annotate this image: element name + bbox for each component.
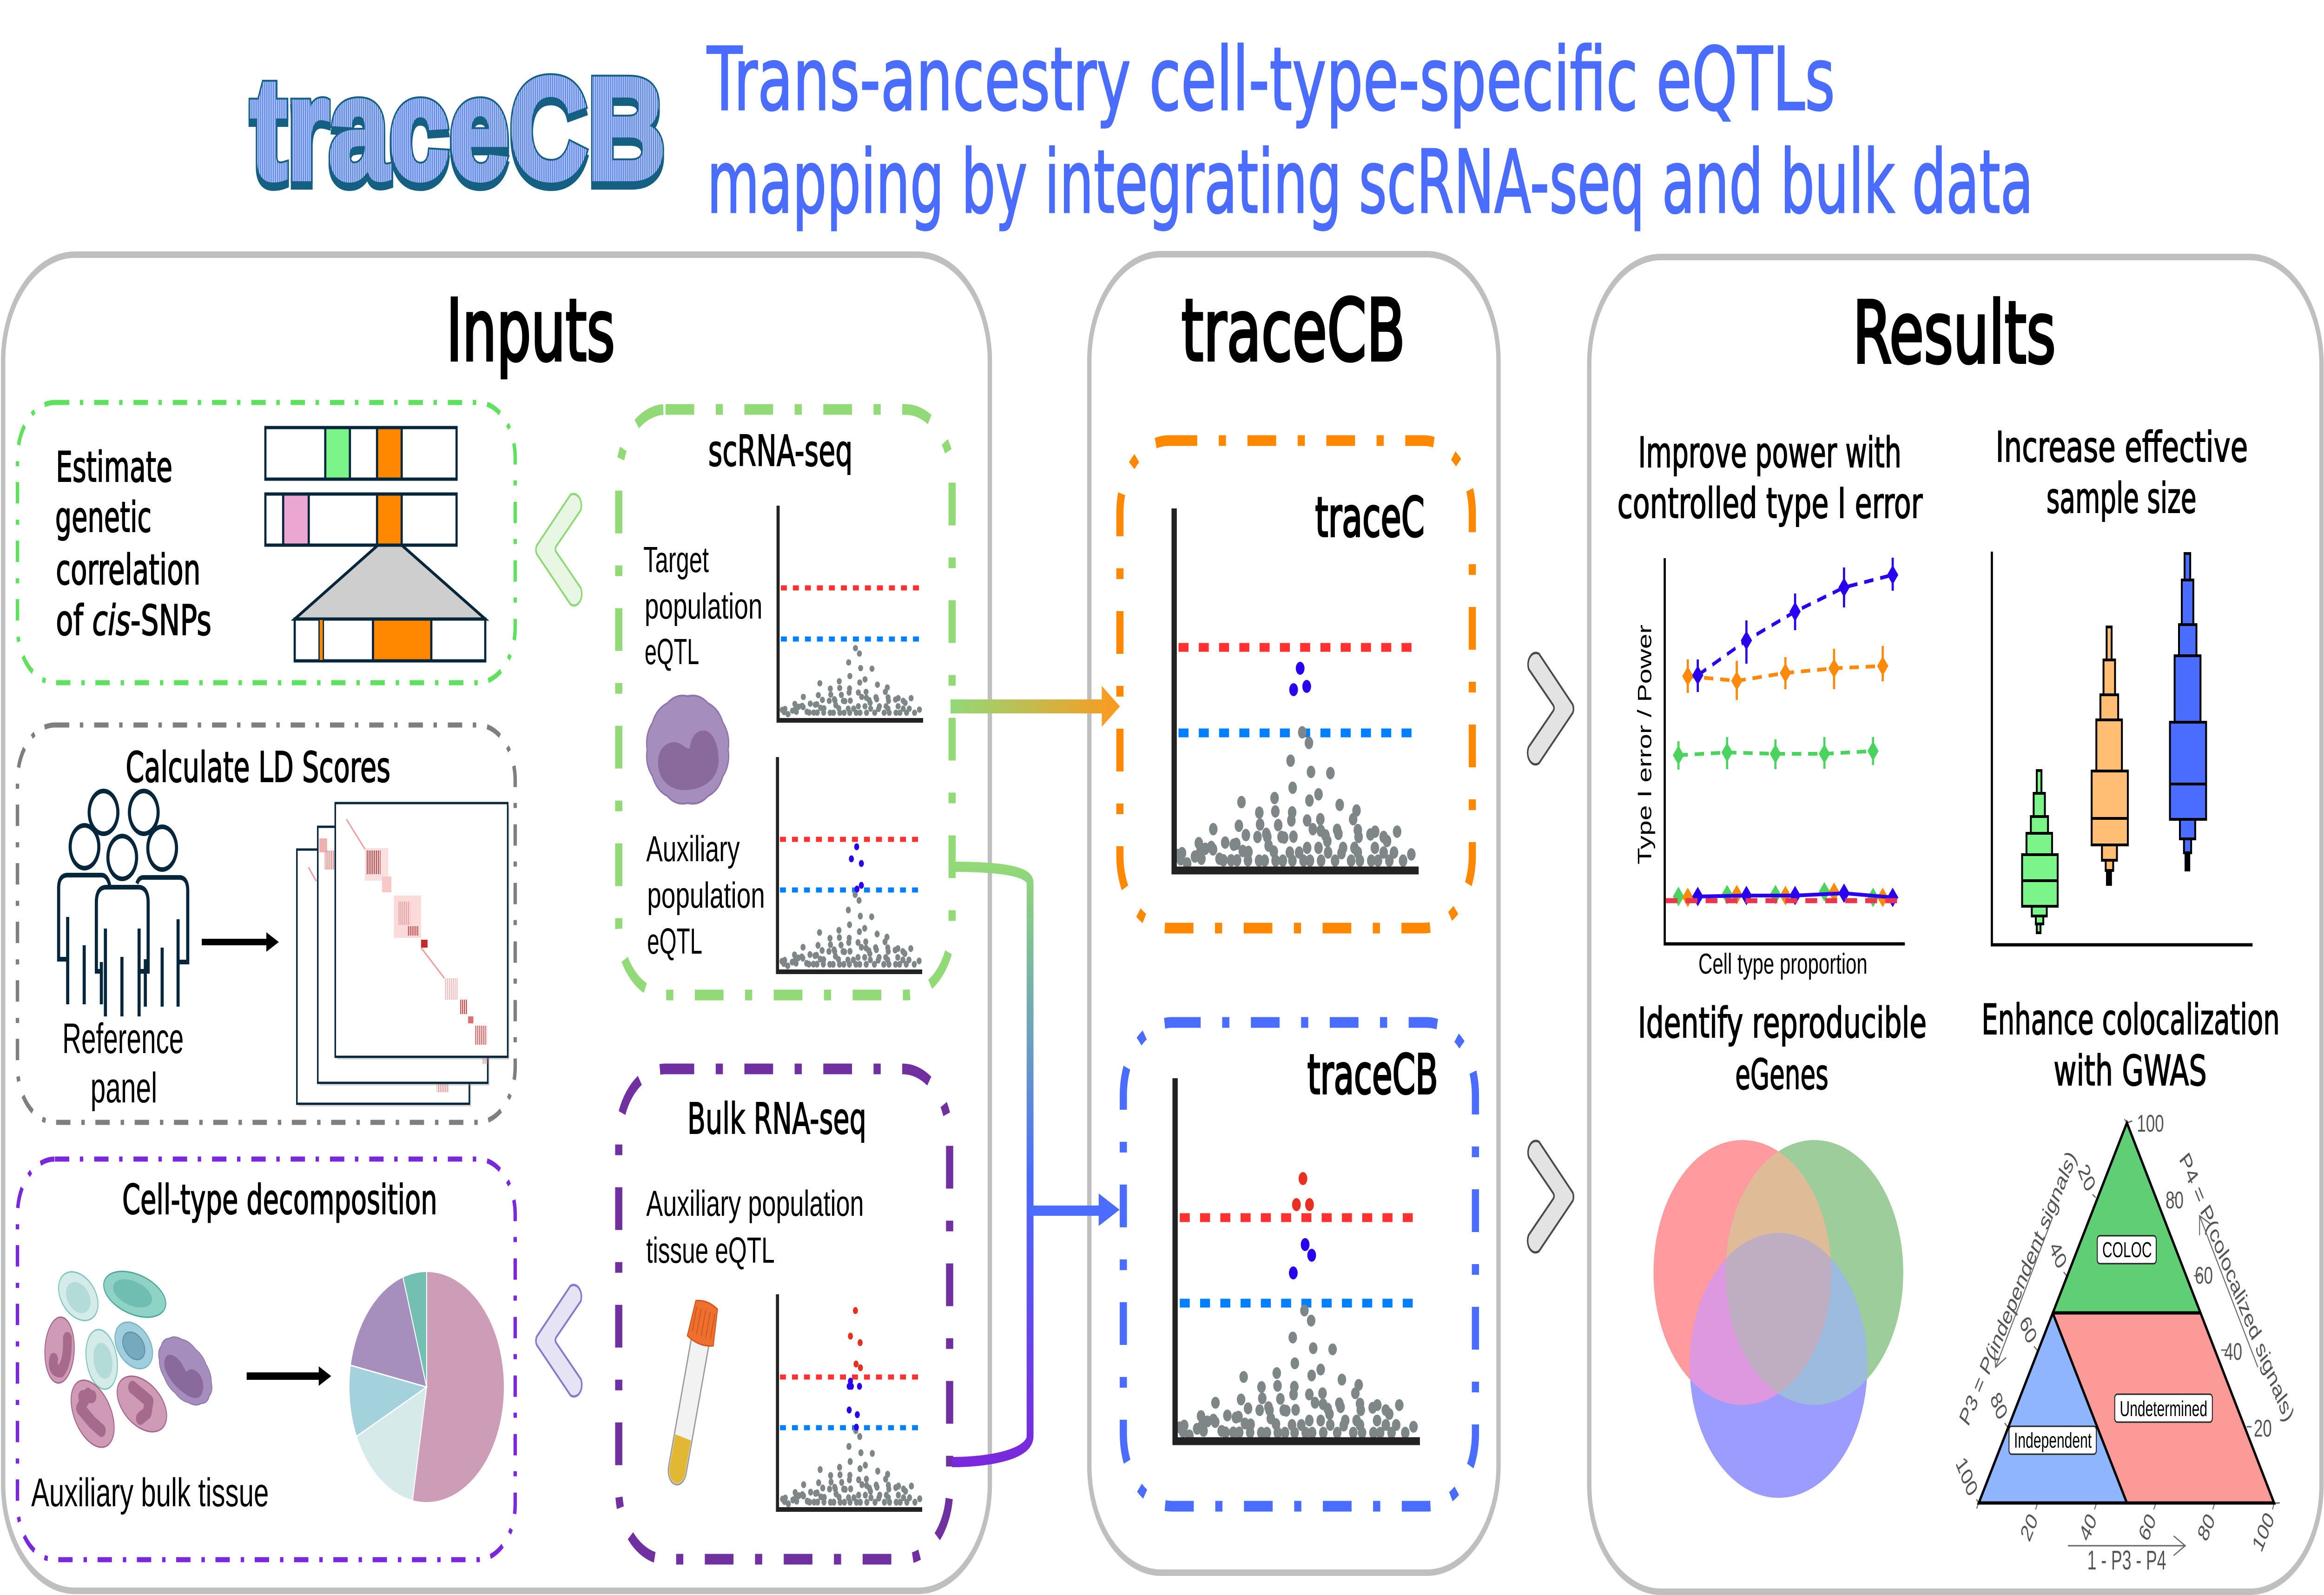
icon: reference panel people — [59, 791, 188, 1016]
subheading: increase effective sample size: sample size — [2047, 475, 2197, 523]
subheading: improve power: Improve power with — [1638, 429, 1901, 477]
subheading: improve power: controlled type I error — [1618, 480, 1923, 528]
heading: traceCB: traceCB — [1182, 281, 1405, 380]
text: auxiliary population tissue eQTL — [646, 1184, 864, 1271]
connector: scRNA and bulk to traceCB — [952, 867, 1120, 1462]
chart: type I error and power lines: Cell type proportion — [1698, 948, 1868, 980]
subheading: enhance colocalization — [1981, 996, 2280, 1095]
text: auxiliary population eQTL: Auxiliary — [646, 829, 740, 870]
panel: results — [1589, 257, 2322, 1592]
text: estimate genetic correlation: of cis-SNPs — [56, 597, 211, 645]
label: traceC: traceC — [1315, 486, 1425, 549]
text: reference panel — [62, 1015, 184, 1112]
ticks: bottom axis: 20 — [2017, 1509, 2041, 1546]
box: cell-type decomposition — [18, 1159, 515, 1560]
text: auxiliary population tissue eQTL: tissue eQTL — [646, 1231, 775, 1271]
chart: type I error and power lines: Type I error / Power — [1634, 625, 1656, 864]
title: mapping by integrating scRNA-seq and bulk data — [707, 131, 2034, 233]
text: auxiliary population eQTL — [646, 829, 765, 962]
box: scRNA-seq — [619, 409, 952, 995]
text: estimate genetic correlation: Estimate — [56, 443, 172, 492]
icon: sample tube — [662, 1297, 720, 1489]
chart: target eQTL scatter — [778, 506, 923, 720]
text: estimate genetic correlation — [55, 443, 211, 645]
panel: traceCB — [1089, 254, 1499, 1573]
text: target population eQTL: population — [645, 587, 762, 627]
subheading: improve power — [1618, 429, 1923, 528]
text: reference panel: Reference — [62, 1015, 184, 1062]
ticks: bottom axis: 100 — [2249, 1508, 2278, 1556]
chart: auxiliary eQTL scatter — [778, 757, 922, 972]
subheading: increase effective sample size — [1995, 423, 2248, 523]
text: auxiliary population eQTL: eQTL — [647, 922, 702, 962]
chart: bulk eQTL scatter — [778, 1294, 922, 1509]
box: traceCB model — [1123, 1022, 1475, 1506]
chevron: to results bottom — [1528, 1141, 1573, 1252]
ticks: P4 axis — [2137, 1110, 2272, 1442]
arrow: people to LD — [202, 932, 279, 952]
box: traceC — [1120, 441, 1472, 928]
chevron: bulk to decomposition — [536, 1285, 582, 1397]
ticks: bottom axis: 80 — [2194, 1509, 2218, 1546]
arrow: cells to pie — [247, 1366, 331, 1386]
logo: traceCB: traceCB — [251, 48, 666, 209]
ticks: P4 axis: 40 — [2224, 1338, 2242, 1365]
panel: inputs — [3, 255, 990, 1591]
chart: boxen plot — [1992, 552, 2252, 945]
chart: venn diagram — [1653, 1140, 1903, 1498]
logo: traceCB: traceCB — [251, 48, 666, 209]
chart: type I error and power lines — [1634, 558, 1905, 980]
heading: results: Results — [1853, 283, 2056, 382]
logo: traceCB: traceCB — [251, 54, 666, 216]
ticks: P4 axis: 60 — [2195, 1262, 2213, 1289]
diagram: genomic bars — [265, 428, 485, 661]
ticks: bottom axis: 60 — [2135, 1509, 2160, 1546]
ticks: P3 axis — [1952, 1160, 2099, 1501]
ticks: bottom axis: 40 — [2076, 1509, 2100, 1546]
heading: scRNA-seq: scRNA-seq — [708, 426, 852, 476]
chart: ternary colocalization plot — [1952, 1110, 2298, 1575]
ticks: P3 axis: 40 — [2046, 1237, 2070, 1273]
text: target population eQTL: Target — [643, 540, 709, 580]
pie chart: cell-type proportions — [349, 1272, 504, 1503]
title: Trans-ancestry cell-type-specific eQTLs — [706, 28, 1835, 131]
ticks: bottom axis — [2017, 1508, 2278, 1556]
chevron: to results top — [1528, 653, 1573, 765]
ticks: P3 axis: 80 — [1987, 1388, 2011, 1424]
chart: traceC scatter — [1173, 508, 1419, 870]
heading: bulk RNA-seq: Bulk RNA-seq — [687, 1094, 866, 1144]
box: calculate LD scores — [18, 725, 515, 1122]
chart: traceCB scatter — [1175, 1078, 1420, 1441]
text: target population eQTL — [643, 540, 762, 672]
ticks: P3 axis: 60 — [2016, 1312, 2040, 1348]
subheading: increase effective sample size: Increase effective — [1995, 423, 2248, 472]
subheading: enhance colocalization: with GWAS — [2053, 1047, 2207, 1095]
axis title: 1 - P3 - P4: 1 - P3 - P4 — [2087, 1545, 2166, 1575]
LD matrix stack — [297, 803, 509, 1107]
icon: immune cell — [647, 696, 729, 804]
ticks: P3 axis: 100 — [1952, 1453, 1981, 1501]
text: estimate genetic correlation: genetic — [55, 494, 152, 542]
ticks: P4 axis: 80 — [2166, 1187, 2184, 1214]
text: target population eQTL: eQTL — [645, 632, 699, 672]
subheading: identify reproducible eGenes — [1638, 999, 1927, 1099]
region label: independent: Independent — [2014, 1429, 2092, 1453]
title — [706, 28, 2034, 233]
text: auxiliary population eQTL: population — [647, 876, 765, 916]
box: bulk RNA-seq — [619, 1069, 950, 1559]
subheading: enhance colocalization: Enhance colocalization — [1981, 996, 2280, 1044]
subheading: identify reproducible eGenes: eGenes — [1735, 1051, 1829, 1099]
heading: calculate LD scores: Calculate LD Scores — [125, 744, 390, 792]
arrow: scRNA to traceC — [951, 686, 1120, 727]
label: traceCB model: traceCB — [1307, 1043, 1438, 1107]
icon: bulk tissue cells — [43, 1262, 220, 1460]
ticks: P4 axis: 100 — [2137, 1110, 2164, 1137]
axis title: P3: P3 = P(independent signals) — [1956, 1147, 2080, 1430]
text: auxiliary population tissue eQTL: Auxiliary population — [646, 1184, 864, 1224]
chevron: scRNA to correlation — [536, 494, 582, 606]
axis title: P4: P4 = P(colocalized signals) — [2176, 1148, 2298, 1426]
region label: undetermined: Undetermined — [2120, 1397, 2207, 1421]
axis arrows — [1994, 1216, 2258, 1555]
subheading: identify reproducible eGenes: Identify reproducible — [1638, 999, 1927, 1048]
heading: cell-type decomposition: Cell-type decomposition — [122, 1176, 437, 1224]
text: reference panel: panel — [91, 1064, 157, 1112]
ticks: P4 axis: 20 — [2254, 1415, 2272, 1442]
box: estimate genetic correlation — [18, 402, 515, 683]
region label: COLOC: COLOC — [2102, 1239, 2152, 1262]
text: estimate genetic correlation: correlation — [56, 546, 200, 594]
ticks: P3 axis: 20 — [2074, 1160, 2099, 1196]
label: auxiliary bulk tissue: Auxiliary bulk tissue — [31, 1470, 269, 1515]
heading: inputs: Inputs — [446, 281, 615, 380]
